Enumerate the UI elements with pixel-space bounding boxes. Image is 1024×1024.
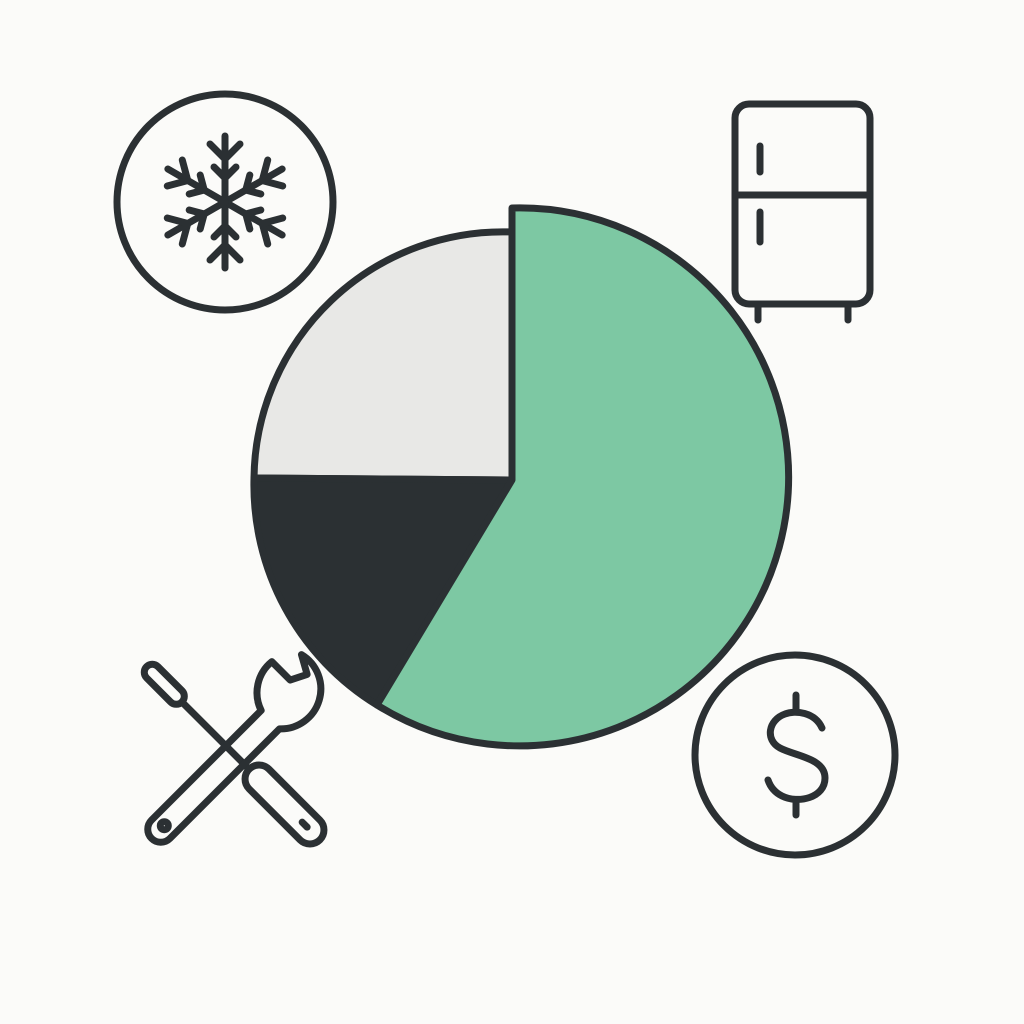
icon: fridge (735, 104, 870, 320)
screwdriver (137, 657, 330, 850)
icon: snowflake (117, 94, 333, 310)
pie slice: dark (254, 478, 512, 705)
pie chart (254, 208, 789, 746)
wrench (123, 642, 337, 857)
icon: dollar (695, 655, 895, 855)
icon: tools (123, 642, 337, 857)
pie slice: green (377, 208, 789, 746)
pie slice: gray (254, 232, 512, 480)
